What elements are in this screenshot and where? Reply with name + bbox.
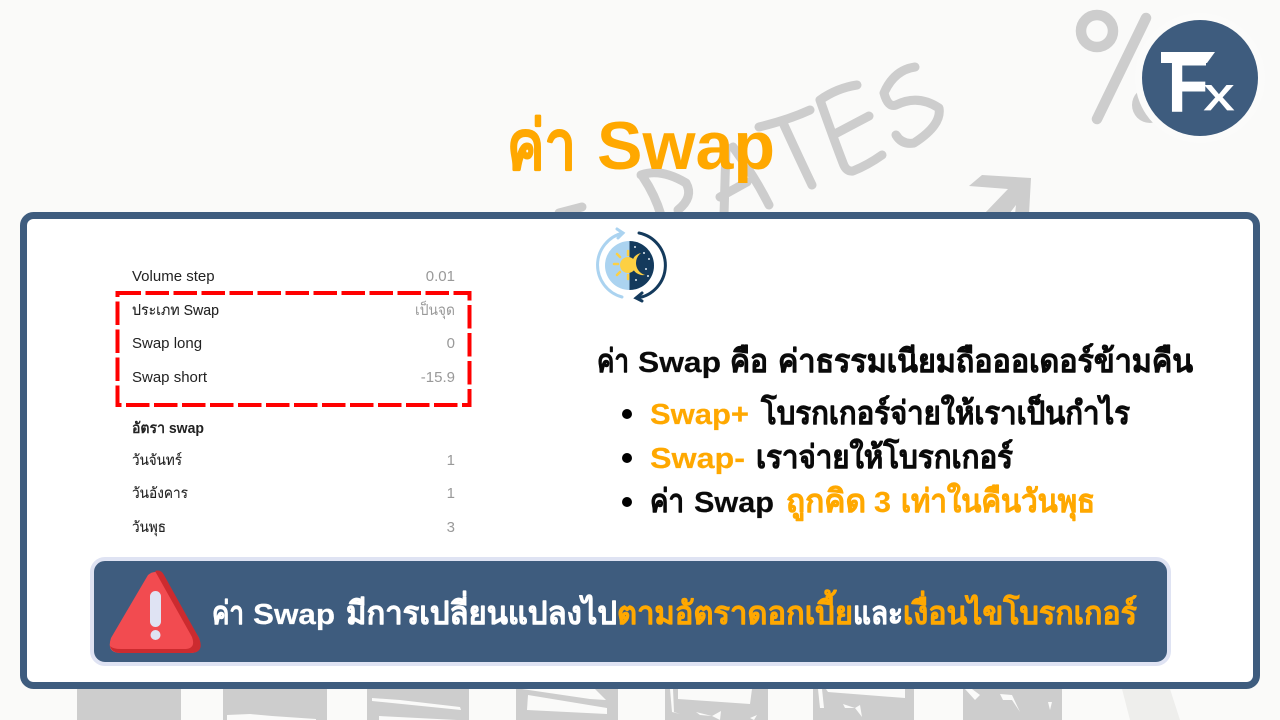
row: swap type: เป็นจุด bbox=[415, 300, 455, 320]
background: percent sign bbox=[1081, 15, 1168, 123]
heading: swap definition: Swap bbox=[638, 347, 721, 379]
banner text: Swap bbox=[253, 599, 335, 631]
row: wednesday: วันพุธ bbox=[132, 519, 166, 537]
row: monday: วันจันทร์ bbox=[132, 452, 182, 469]
banner text: เงื่อนไขโบรกเกอร์ bbox=[903, 590, 1137, 631]
title bbox=[507, 108, 775, 184]
logo: TFx badge bbox=[1135, 13, 1265, 143]
row: swap short: -15.9 bbox=[421, 369, 455, 386]
subheading: swap rate: อัตรา swap bbox=[132, 420, 204, 437]
logo letter F: F bbox=[1168, 39, 1208, 128]
heading: swap definition bbox=[597, 343, 1193, 379]
panel: main card bbox=[24, 216, 1256, 686]
row: swap short bbox=[132, 369, 455, 386]
row: swap short: Swap short bbox=[132, 369, 208, 386]
bullet list bbox=[622, 393, 1130, 522]
row: monday bbox=[132, 452, 455, 469]
bullet: triple swap: 3 bbox=[874, 487, 891, 519]
background: up arrow bbox=[969, 175, 1031, 214]
banner text: ค่า bbox=[212, 595, 244, 631]
row: swap long bbox=[132, 335, 455, 352]
row: swap long: 0 bbox=[447, 335, 455, 352]
bullet: swap minus: Swap- bbox=[650, 443, 745, 475]
icon: day and night cycle bbox=[598, 229, 665, 301]
row: wednesday: 3 bbox=[447, 519, 455, 536]
background: hand-written RATES bbox=[559, 67, 939, 215]
bullet: swap plus bbox=[622, 393, 1130, 431]
bullet: triple swap: เท่าในคืนวันพุธ bbox=[901, 482, 1095, 522]
bullet: triple swap bbox=[622, 482, 1095, 522]
bullet: swap plus: Swap+ bbox=[650, 399, 749, 431]
icon: warning triangle bbox=[110, 570, 201, 653]
row: swap type: ประเภท Swap bbox=[132, 302, 219, 319]
bullet: swap minus bbox=[622, 438, 1013, 475]
row: swap type bbox=[132, 300, 455, 320]
row: volume step: Volume step bbox=[132, 268, 215, 285]
banner text: ตามอัตราดอกเบี้ย bbox=[617, 589, 853, 631]
banner text: และ bbox=[853, 595, 903, 631]
bullet: triple swap: ถูกคิด bbox=[786, 483, 866, 522]
row: volume step bbox=[132, 268, 455, 285]
banner text: มีการเปลี่ยนแปลงไป bbox=[346, 590, 617, 631]
row: swap long: Swap long bbox=[132, 335, 202, 352]
logo mark: T bar bbox=[1161, 52, 1215, 63]
title: ค่า bbox=[507, 108, 576, 184]
bullet: swap plus: โบรกเกอร์จ่ายให้เราเป็นกำไร bbox=[760, 393, 1130, 431]
row: tuesday: 1 bbox=[447, 485, 455, 502]
row: wednesday bbox=[132, 519, 455, 537]
table: symbol specifications bbox=[132, 268, 455, 537]
callout: red dashed highlight bbox=[118, 293, 470, 405]
title: Swap bbox=[597, 108, 775, 184]
background: bottom strip bbox=[77, 689, 1180, 720]
row: volume step: 0.01 bbox=[426, 268, 455, 285]
heading: swap definition: คือ bbox=[730, 343, 768, 379]
bullet: triple swap: ค่า bbox=[650, 483, 684, 519]
callout: warning banner bbox=[92, 559, 1169, 664]
logo letter x: x bbox=[1204, 68, 1234, 120]
banner text bbox=[212, 589, 1137, 631]
bullet: swap minus: เราจ่ายให้โบรกเกอร์ bbox=[756, 438, 1013, 475]
bullet: triple swap: Swap bbox=[694, 487, 774, 519]
row: tuesday: วันอังคาร bbox=[132, 485, 188, 502]
row: monday: 1 bbox=[447, 452, 455, 469]
row: tuesday bbox=[132, 485, 455, 502]
heading: swap definition: ค่าธรรมเนียมถือออเดอร์ข้ามคืน bbox=[778, 343, 1193, 379]
heading: swap definition: ค่า bbox=[597, 343, 629, 379]
